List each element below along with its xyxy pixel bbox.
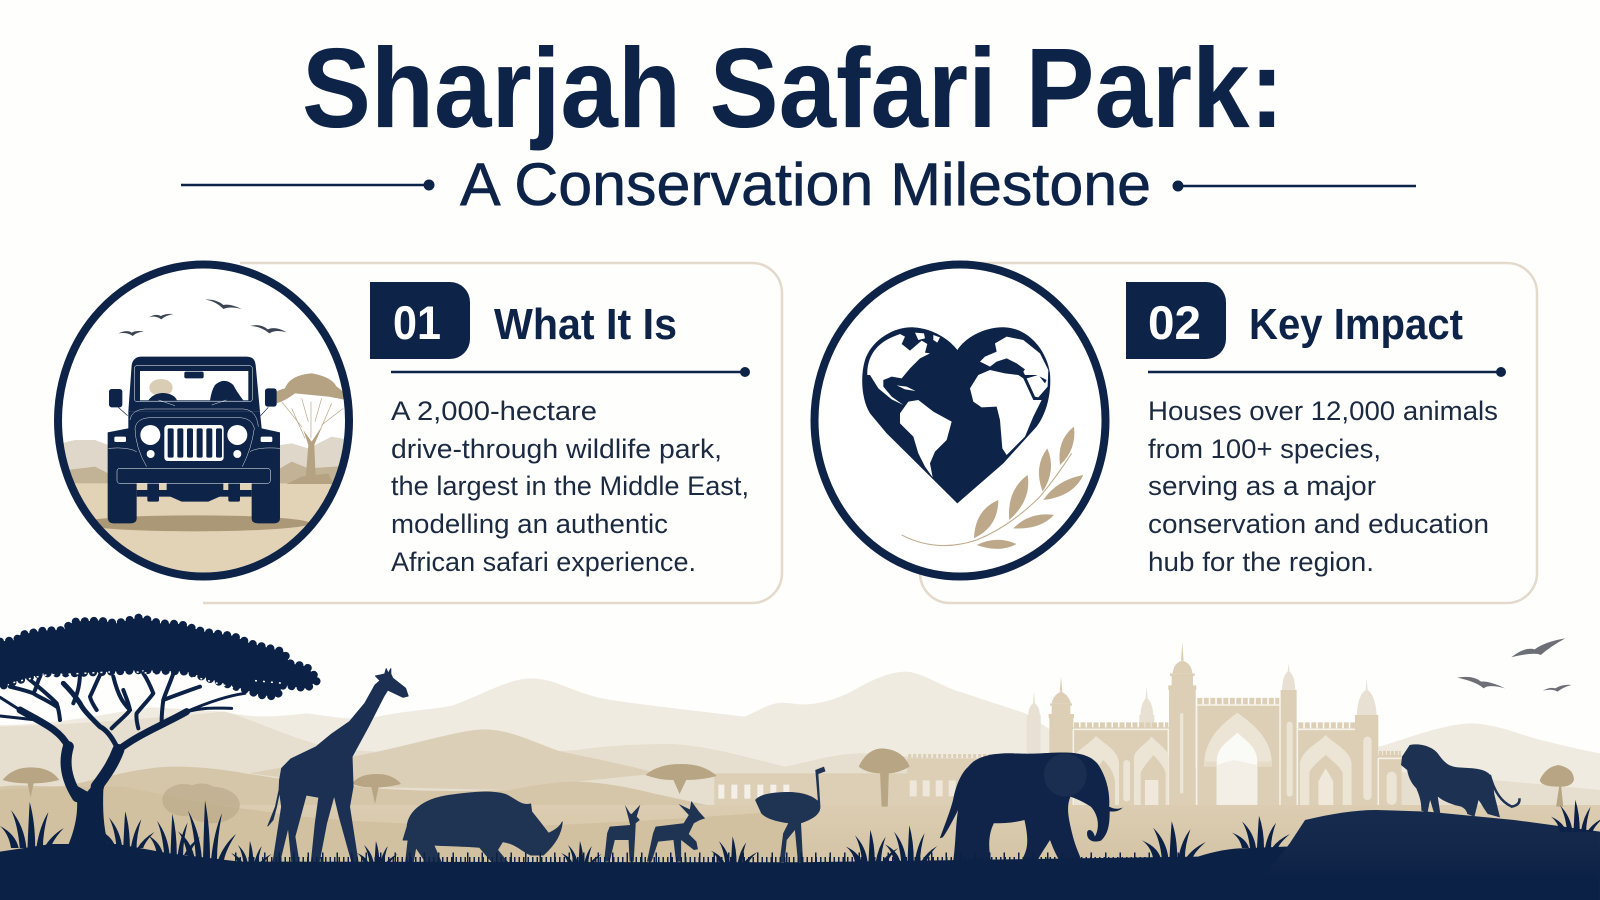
card outline [203, 263, 782, 603]
body text: from 100+ species, [1148, 434, 1381, 464]
body text: Houses over 12,000 animals [1148, 396, 1498, 426]
occupants [149, 379, 173, 396]
gazelle two [647, 801, 705, 862]
body text: drive-through wildlife park, [391, 434, 722, 464]
ground grass fringe [235, 858, 1190, 860]
rock [1267, 810, 1600, 877]
body text: the largest in the Middle East, [391, 471, 749, 501]
panel: what it is [55, 263, 782, 603]
jeep body [108, 357, 280, 523]
ground shadow [80, 515, 310, 531]
mid tan peak [250, 729, 658, 790]
card outline [920, 263, 1537, 603]
elephant [940, 752, 1123, 862]
birds right [1457, 638, 1571, 692]
palace arches [1074, 713, 1397, 806]
palace light lines [1073, 705, 1402, 805]
body text: conservation and education [1148, 509, 1489, 539]
laurel branch [902, 427, 1083, 549]
middle mountains [0, 712, 1600, 817]
rhino [403, 792, 562, 862]
continents [867, 333, 1048, 477]
far light towers [1027, 663, 1377, 755]
body text: hub for the region. [1148, 547, 1374, 577]
subtitle with rules: A Conservation Milestone [460, 151, 1151, 218]
body text [391, 396, 749, 577]
palace gate [1027, 642, 1402, 806]
acacia behind jeep [276, 373, 344, 404]
main gate opening [1217, 733, 1257, 806]
panel: key impact [814, 263, 1537, 603]
body text: serving as a major [1148, 471, 1376, 501]
sand foreground [0, 805, 1600, 878]
low palace wall [714, 756, 1051, 807]
lion [1401, 744, 1519, 817]
headlights [114, 425, 272, 458]
bumper [117, 468, 270, 483]
badge 01: 01 [393, 296, 441, 349]
safari landscape illustration [0, 617, 1600, 900]
palace masonry [1049, 642, 1402, 806]
heading: what it is: What It Is [494, 300, 677, 349]
distant mountains [0, 672, 1600, 817]
mirror stalks [118, 407, 268, 416]
birds [118, 299, 287, 336]
icon: heart globe with laurel [814, 264, 1106, 576]
heading rule [1148, 367, 1506, 377]
battlements [1074, 701, 1401, 753]
ostrich [755, 767, 826, 862]
tree lace highlights [13, 672, 283, 691]
ground [0, 844, 1600, 900]
body text [1148, 396, 1498, 577]
body text: modelling an authentic [391, 509, 668, 539]
grass tufts [0, 800, 1600, 864]
tree limbs [0, 673, 245, 797]
tree trunk [67, 765, 110, 845]
body text: A 2,000-hectare [391, 396, 597, 426]
backdrop hills [64, 436, 344, 473]
elephant ear [1044, 753, 1087, 797]
heading: key impact: Key Impact [1249, 300, 1463, 349]
badge 01 [370, 282, 470, 359]
grille [164, 425, 224, 461]
badge 02 [1126, 282, 1226, 359]
small acacia trees [3, 748, 1574, 807]
title: Sharjah Safari Park: [302, 25, 1284, 151]
body text: African safari experience. [391, 547, 696, 577]
tree crown [0, 617, 318, 697]
hood and fender lines [108, 400, 280, 467]
icon: safari jeep in circle [55, 264, 358, 583]
sand ground [75, 483, 332, 572]
left foreground hill band [0, 787, 800, 863]
acacia tree [0, 617, 318, 845]
gazelle one [604, 805, 640, 862]
heart [862, 327, 1050, 503]
subtitle with rules [181, 151, 1416, 218]
giraffe [268, 669, 408, 863]
heading rule [391, 367, 750, 377]
rolling sand hills [0, 767, 1600, 877]
badge 02: 02 [1148, 296, 1201, 349]
windshield [134, 366, 252, 402]
bush [162, 783, 240, 823]
